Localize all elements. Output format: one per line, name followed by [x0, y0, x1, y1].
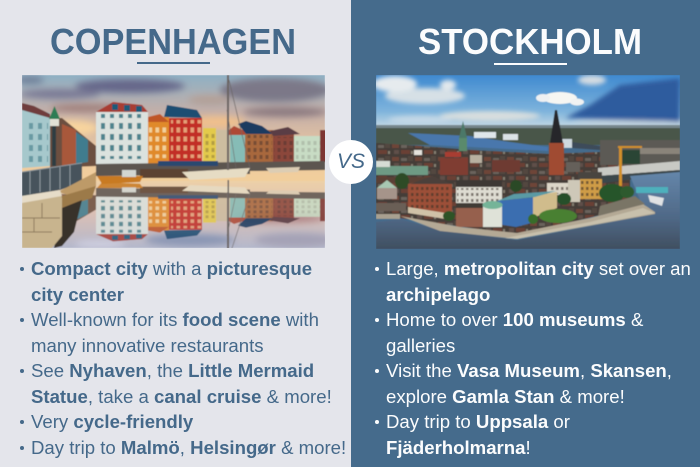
bullet: food scene: Well-known for its food scene with: [31, 309, 319, 330]
bullet: day trips: Day trip to Uppsala or: [386, 411, 570, 432]
photo: Nyhavn, Copenhagen: [22, 75, 325, 248]
moored boats: [636, 187, 668, 193]
bullet: food scene: [31, 307, 319, 358]
heading underline: Copenhagen: [137, 62, 210, 64]
heading: Stockholm: STOCKHOLM: [418, 21, 642, 62]
bullet: food scene: many innovative restaurants: [31, 334, 264, 356]
badge: VS circle: [329, 140, 373, 184]
blue and cream block: [497, 197, 535, 227]
bullet: sights: [31, 358, 332, 409]
bullet: day trips: [386, 409, 570, 460]
crane: [619, 146, 622, 186]
channel: [408, 133, 548, 151]
mustard block: [580, 178, 602, 199]
bridge: [22, 163, 82, 196]
bullet list: Copenhagen: [20, 258, 346, 458]
white block mid: [547, 183, 580, 195]
bullet: day trips: Fjäderholmarna!: [386, 436, 531, 458]
bridge and right water: [598, 161, 680, 176]
bullet: metropolitan city: Large, metropolitan city set over an: [386, 258, 691, 279]
far shore: [376, 125, 680, 145]
panel: Stockholm background: [351, 0, 700, 467]
brown and round tower: [456, 207, 483, 227]
bullet: sights: See Nyhaven, the Little Mermaid: [31, 360, 314, 381]
bullet: metropolitan city: [386, 256, 691, 307]
white block: [456, 186, 502, 204]
red brick block: [408, 178, 452, 218]
bullet: compact city: city center: [31, 284, 124, 304]
photo: Gamla Stan, Stockholm: [376, 75, 680, 249]
bullet: sights: [386, 358, 672, 409]
bullet: day trips: Day trip to Malmö, Helsingør & more!: [31, 436, 346, 458]
bullet: sights: Statue, take a canal cruise & more!: [31, 386, 332, 406]
bullet: cycling: Very cycle-friendly: [31, 411, 193, 432]
heading: Copenhagen: COPENHAGEN: [50, 21, 296, 62]
bullet list: Stockholm: [375, 258, 691, 458]
churches: [459, 137, 467, 151]
panel: Copenhagen background: [0, 0, 351, 467]
bullet: sights: explore Gamla Stan & more!: [386, 386, 625, 406]
heading underline: Stockholm: [494, 63, 567, 65]
bullet: museums: Home to over 100 museums &: [386, 309, 643, 330]
badge: VS circle: VS: [337, 150, 365, 173]
bullet: metropolitan city: archipelago: [386, 284, 490, 304]
bullet: museums: [386, 307, 643, 358]
green-roofed left: [376, 166, 428, 175]
bullet: museums: galleries: [386, 334, 455, 356]
city mass: [376, 140, 680, 235]
quay: [400, 204, 655, 239]
bullet: compact city: [31, 256, 312, 307]
bullet: sights: Visit the Vasa Museum, Skansen,: [386, 360, 672, 381]
bullet: compact city: Compact city with a picturesque: [31, 258, 312, 279]
